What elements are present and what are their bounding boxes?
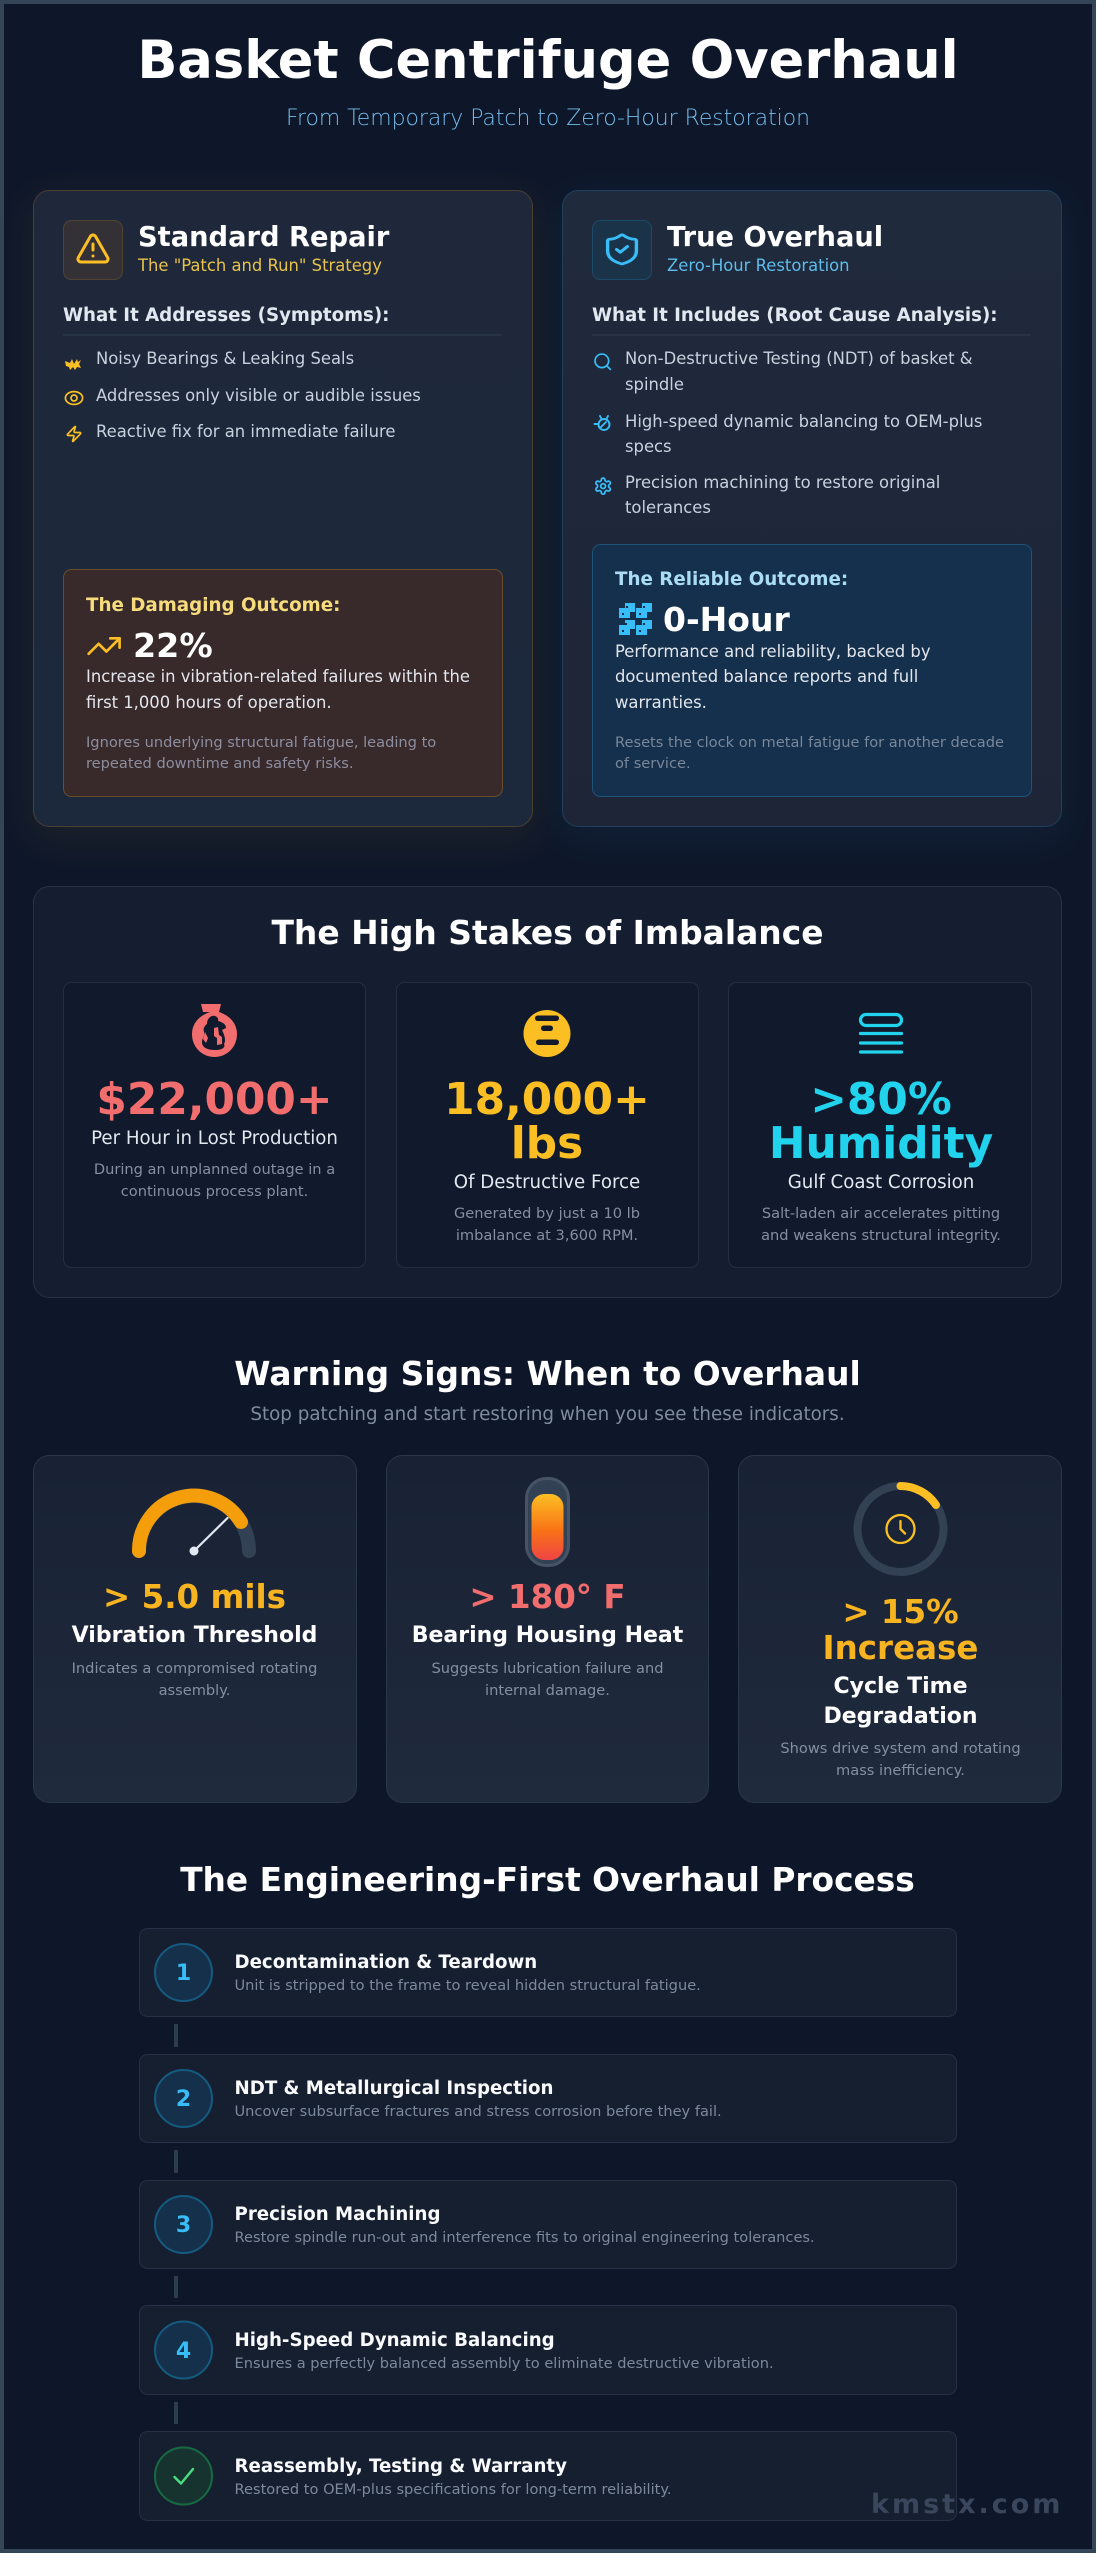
icon: check [155,2448,212,2504]
callout: reliable outcome: warranties. [615,693,707,712]
step 3: Precision Machining [234,2204,440,2225]
stat card: lost production [64,982,366,1268]
stat card: humidity: Gulf Coast Corrosion [788,1172,974,1193]
list item: Precision machining to restore original [625,473,940,492]
icon: shield [592,220,652,280]
callout: reliable outcome: Performance and reliability, backed by [615,642,931,661]
list item: High-speed dynamic balancing to OEM-plus [625,412,982,431]
list item: specs [625,437,672,456]
step number [155,2196,212,2253]
warning card: heat: internal damage. [485,1682,610,1699]
step 2 [140,2054,956,2142]
icon: trending up [89,638,120,654]
callout: damaging outcome: first 1,000 hours of operation. [86,693,332,712]
section: warning signs [34,1355,1062,1802]
list heading: What It Addresses (Symptoms): [63,305,389,326]
warning card: heat: Suggests lubrication failure and [432,1660,663,1677]
step 4 [140,2306,956,2394]
panel: true overhaul [562,190,1062,837]
warning card: cycle time: Degradation [823,1704,978,1729]
stat card: humidity: Salt-laden air accelerates pitting [762,1205,1000,1222]
stat card: lost production: During an unplanned outage in a [94,1161,335,1178]
warning card: heat: Bearing Housing Heat [412,1623,684,1648]
section: overhaul process [140,1861,956,2520]
warning card: vibration: Indicates a compromised rotating [72,1660,317,1677]
warning card: vibration: Vibration Threshold [72,1623,317,1648]
list item: Addresses only visible or audible issues [96,386,421,405]
tagline: Zero-Hour Restoration [667,256,850,275]
connectors [174,2024,178,2424]
icon: gear [596,478,610,494]
callout: reliable outcome: Resets the clock on metal fatigue for another decade [615,734,1004,751]
callout: reliable outcome [592,544,1032,796]
warning card: heat: > 180° F [469,1578,626,1616]
step 5 [140,2432,956,2520]
warning card: cycle time: Shows drive system and rotating [780,1740,1021,1757]
callout: damaging outcome: 22% [133,626,213,665]
callout: damaging outcome: repeated downtime and safety risks. [86,755,354,772]
stat card: lost production: continuous process plant. [121,1183,308,1200]
list heading: What It Includes (Root Cause Analysis): [592,305,998,326]
step 1: Unit is stripped to the frame to reveal hidden structural fatigue. [234,1977,701,1994]
subheading: Stop patching and start restoring when you see these indicators. [250,1404,845,1425]
heading: true overhaul: True Overhaul [667,222,883,253]
icon: money bag [192,1004,237,1057]
tagline: The "Patch and Run" Strategy [137,256,382,275]
icon: humidity layers [860,1014,902,1052]
stat card: destructive force: Of Destructive Force [454,1172,640,1193]
panel: high stakes of imbalance [34,886,1062,1298]
subtitle: From Temporary Patch to Zero-Hour Restoration [286,106,810,131]
heading: standard repair: Standard Repair [138,222,390,253]
callout: damaging outcome: The Damaging Outcome: [86,595,340,616]
step 3 [140,2180,956,2268]
icon: zero-hour blocks [619,603,652,635]
warning card: cycle time: Cycle Time [833,1674,968,1699]
icon: magnifier [595,354,610,369]
icon: warning triangle [64,220,122,280]
stat card: destructive force: imbalance at 3,600 RPM. [456,1227,638,1244]
header [137,30,959,131]
warning card: vibration: > 5.0 mils [103,1578,286,1616]
list item: Reactive fix for an immediate failure [96,422,395,441]
step 3: 3 [176,2213,191,2238]
step 1: 1 [176,1961,191,1986]
step 1 [140,1928,956,2016]
step 2: 2 [176,2087,191,2112]
callout: damaging outcome: Increase in vibration-related failures within the [86,667,470,686]
warning card: cycle time: > 15% [842,1593,959,1631]
stat card: humidity [728,982,1032,1268]
stat card: humidity: >80% [810,1074,952,1125]
step 2: Uncover subsurface fractures and stress corrosion before they fail. [234,2103,722,2120]
stat card: lost production: $22,000+ [96,1074,333,1125]
step 2: NDT & Metallurgical Inspection [234,2078,553,2099]
heading: The High Stakes of Imbalance [271,913,824,952]
title: Basket Centrifuge Overhaul [137,30,959,91]
callout: reliable outcome: The Reliable Outcome: [615,569,848,590]
stat card: destructive force: 18,000+ [444,1074,650,1125]
step 1: Decontamination & Teardown [234,1952,537,1973]
callout: damaging outcome: Ignores underlying structural fatigue, leading to [86,734,436,751]
icon: balance [594,416,610,430]
heading: Warning Signs: When to Overhaul [234,1355,861,1393]
icon: eye [65,392,83,404]
list item: Non-Destructive Testing (NDT) of basket & [625,349,973,368]
stat card: destructive force: lbs [511,1118,583,1169]
stat card: humidity: and weakens structural integrity. [761,1227,1001,1244]
stat card: destructive force [396,982,698,1268]
list item: spindle [625,375,684,394]
panel: standard repair [33,190,533,837]
callout: damaging outcome [64,570,502,796]
warning card: vibration [34,1456,356,1802]
step 3: Restore spindle run-out and interference fits to original engineering tolerances. [234,2229,815,2246]
stat card: lost production: Per Hour in Lost Production [91,1128,338,1149]
icon: thermometer [526,1478,568,1566]
step number [155,2322,212,2378]
watermark: kmstx.com [871,2489,1063,2520]
warning card: heat [386,1456,708,1802]
list item: tolerances [625,498,711,517]
icon: force weight [524,1010,570,1057]
warning card: vibration: assembly. [159,1682,230,1699]
callout: reliable outcome: of service. [615,755,691,772]
stat card: humidity: Humidity [769,1118,993,1169]
warning card: cycle time: Increase [823,1629,978,1667]
list item: Noisy Bearings & Leaking Seals [96,349,354,368]
step 5: Reassembly, Testing & Warranty [234,2456,567,2477]
icon: progress clock [858,1486,944,1572]
icon: vibration gauge [139,1496,249,1556]
callout: reliable outcome: 0-Hour [663,600,790,639]
warning card: cycle time: mass inefficiency. [836,1762,965,1779]
step number [155,2070,212,2127]
step 4: Ensures a perfectly balanced assembly to eliminate destructive vibration. [234,2355,774,2372]
callout: reliable outcome: documented balance reports and full [615,667,918,686]
icon: noise [65,359,81,370]
warning card: cycle time [738,1456,1062,1802]
step number [155,1944,212,2001]
step 4: 4 [176,2339,191,2364]
stat card: destructive force: Generated by just a 10 lb [454,1205,640,1222]
step 4: High-Speed Dynamic Balancing [234,2330,555,2351]
heading: The Engineering-First Overhaul Process [180,1861,915,1899]
step 5: Restored to OEM-plus specifications for long-term reliability. [234,2481,672,2498]
icon: bolt [67,426,81,442]
